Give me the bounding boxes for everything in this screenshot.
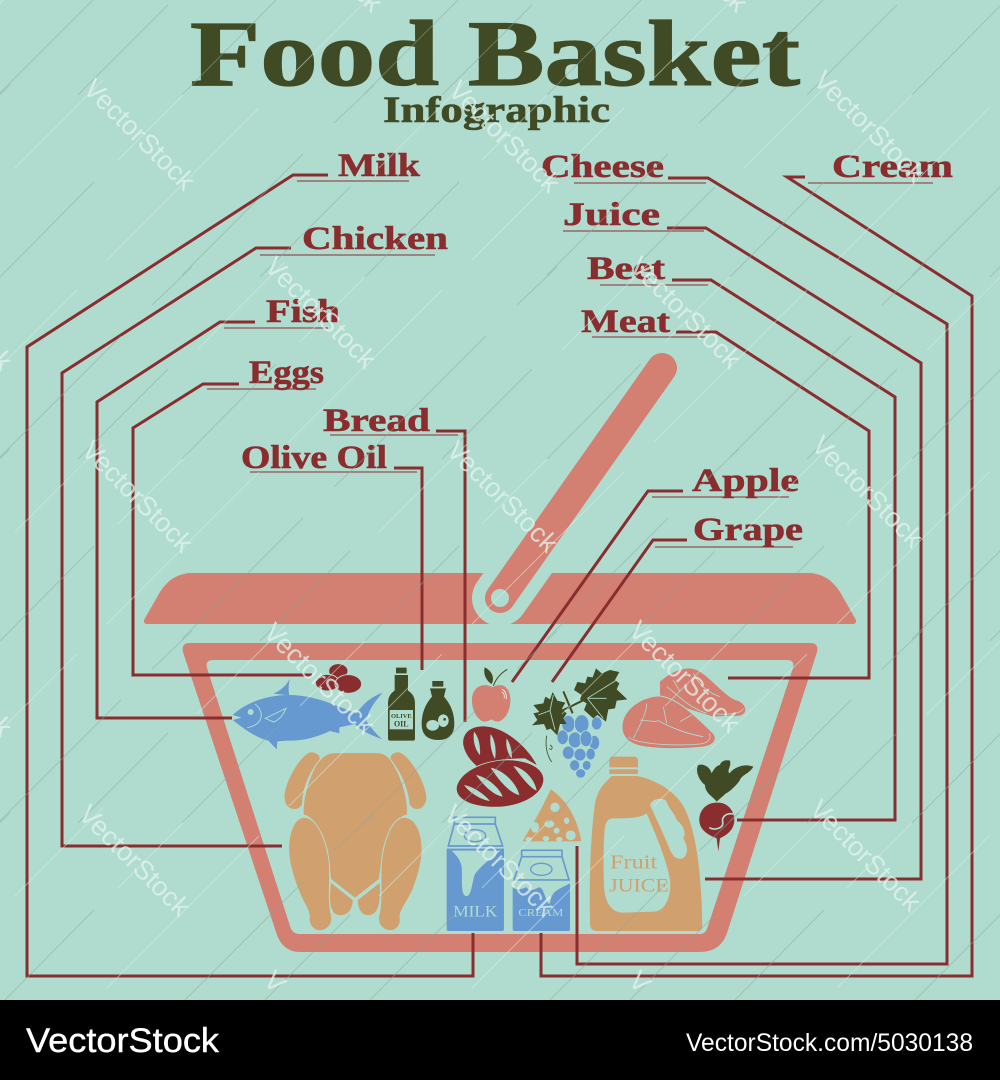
watermarks: VectorStock [808,65,931,188]
icon: olive oil bottle: OIL [394,719,409,728]
icon: cream carton: CREAM [518,908,564,919]
icon: grape [532,668,627,778]
connector lines [27,175,972,976]
connector: beet [672,280,895,820]
connector: meat [676,332,869,678]
label: chicken: Chicken [302,221,448,257]
title: Food Basket [190,3,800,106]
watermarks: VectorStock [76,435,199,558]
connector: cheese [577,178,947,964]
label: eggs: Eggs [249,355,324,391]
label: meat: Meat [581,304,670,340]
basket handle [491,368,662,607]
icon: juice jug: Fruit [610,851,658,873]
watermarks: VectorStock [623,615,746,738]
watermarks: VectorStock [438,799,561,922]
icon: chicken [284,752,427,931]
connector: eggs [133,384,312,675]
icon: cheese [523,789,581,842]
watermarks: V [623,965,657,999]
connector: milk [27,175,473,976]
label: beet: Beet [587,251,665,287]
icon: fish [233,678,383,749]
icon: cream carton [513,850,570,931]
watermarks: VectorStock [624,251,747,374]
label: apple: Apple [692,463,799,499]
icon: milk carton: MILK [453,904,497,921]
label: grape: Grape [693,512,803,548]
watermarks: V [258,965,292,999]
watermarks: VectorStock [259,251,382,374]
icon: beet [697,760,753,852]
basket body [183,643,817,952]
icon: bread [457,726,543,807]
watermarks: VectorStock [806,430,929,553]
connector: chicken [62,248,291,846]
label underlines [207,181,933,547]
icon: juice jug: JUICE [609,875,669,896]
label: fish: Fish [266,294,340,330]
icon: juice jug [590,757,702,931]
icon: olive oil flask [422,681,454,740]
label: juice: Juice [563,197,660,233]
footer bar [0,1000,1000,1080]
connector: fish [97,322,255,718]
label: bread: Bread [323,403,430,439]
connector: cream [541,177,972,976]
watermarks: VectorStock [73,799,196,922]
label: cream: Cream [832,149,953,185]
icon: olive oil bottle: OLIVE [391,713,412,720]
connector: apple [512,491,683,682]
label: cheese: Cheese [541,149,664,185]
subtitle: Infographic [383,90,610,131]
icon: apple [472,667,510,722]
watermarks: VectorStock [441,435,564,558]
watermarks: VectorStock [258,617,381,740]
watermarks: VectorStock [804,794,927,917]
label: milk: Milk [338,148,421,184]
icon: meat [622,668,745,749]
icon: milk carton [447,817,504,931]
watermarks: VectorStock [78,73,201,196]
item labels [241,148,953,548]
watermarks: VectorStock [443,75,566,198]
icon: olive oil bottle [388,668,415,741]
connector: olive oil [394,468,422,670]
basket lid [144,400,856,624]
connector: bread [436,431,465,722]
connector: grape [552,540,687,682]
footer bar: VectorStock [26,1022,220,1060]
footer bar: VectorStock.com/5030138 [686,1029,973,1057]
icon: eggs [315,664,362,693]
connector: juice [667,228,921,879]
label: olive oil: Olive Oil [241,440,387,476]
